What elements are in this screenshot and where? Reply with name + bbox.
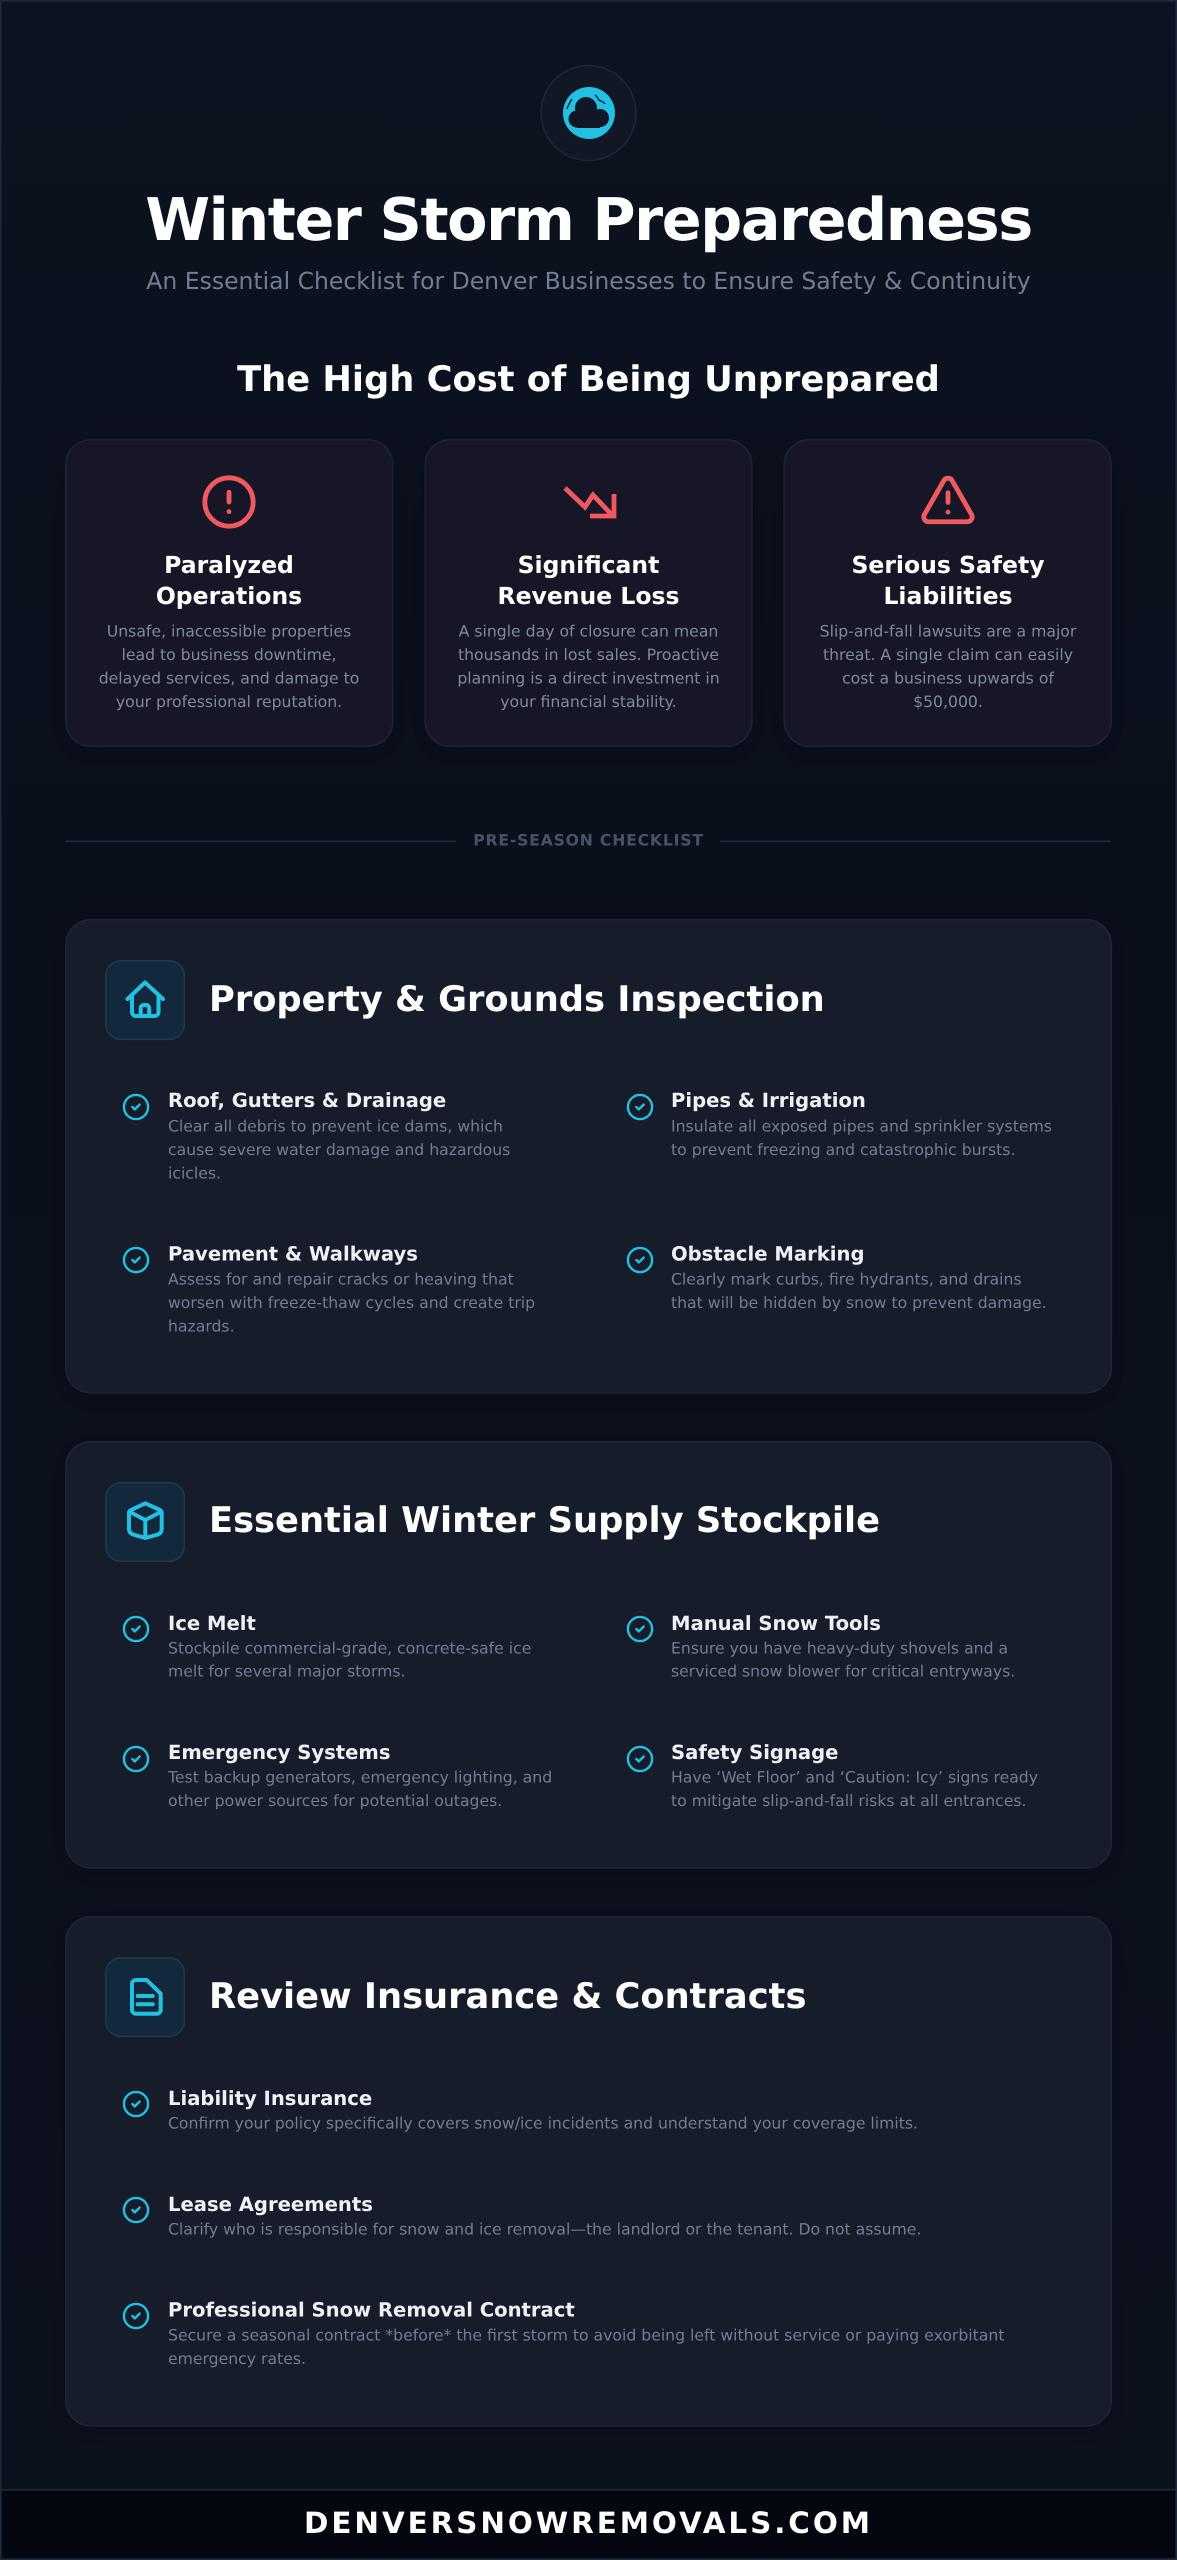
- heading: Revenue Loss: [498, 582, 679, 610]
- item: pavement: [124, 1243, 535, 1336]
- item: snow removal contract: [124, 2299, 1004, 2368]
- heading: Property & Grounds Inspection: [209, 979, 825, 1020]
- item: signage: Have ‘Wet Floor’ and ‘Caution: Icy’ signs ready: [671, 1768, 1038, 1787]
- panel: property and grounds: [66, 920, 1111, 1393]
- heading: Significant: [518, 551, 659, 579]
- item: snow removal contract: Secure a seasonal contract *before* the first storm to avoid being left without service or paying exorbitant: [168, 2326, 1004, 2345]
- description: delayed services, and damage to: [99, 669, 359, 688]
- description: your financial stability.: [500, 692, 677, 711]
- description: planning is a direct investment in: [457, 669, 720, 688]
- item: pavement: Pavement & Walkways: [168, 1243, 418, 1266]
- item: ice melt: Ice Melt: [168, 1612, 256, 1635]
- item: snow tools: [628, 1612, 1015, 1681]
- footer: [0, 2489, 1177, 2560]
- item: pavement: Assess for and repair cracks or heaving that: [168, 1270, 514, 1289]
- header icon: cloud badge: [541, 66, 636, 160]
- item: signage: [628, 1741, 1038, 1810]
- heading: Paralyzed: [164, 551, 294, 579]
- item: signage: to mitigate slip-and-fall risks at all entrances.: [671, 1791, 1027, 1810]
- heading: Serious Safety: [851, 551, 1045, 579]
- heading: high cost: The High Cost of Being Unprepared: [237, 359, 940, 400]
- item: ice melt: [124, 1612, 531, 1681]
- icon: box: [106, 1483, 184, 1561]
- item: snow tools: Manual Snow Tools: [671, 1612, 881, 1635]
- item: obstacle: that will be hidden by snow to prevent damage.: [671, 1293, 1047, 1312]
- panel: revenue loss: [425, 440, 752, 746]
- panel: safety liabilities: [784, 440, 1111, 746]
- description: $50,000.: [913, 692, 983, 711]
- item: emergency systems: [124, 1741, 552, 1810]
- item: ice melt: melt for several major storms.: [168, 1662, 406, 1681]
- item: pipes: to prevent freezing and catastrophic bursts.: [671, 1140, 1015, 1159]
- icon: warning triangle: [921, 476, 975, 524]
- item: emergency systems: Test backup generators, emergency lighting, and: [167, 1768, 552, 1787]
- panel: insurance and contracts: [66, 1917, 1111, 2426]
- item: pavement: worsen with freeze-thaw cycles and create trip: [168, 1293, 535, 1312]
- description: your professional reputation.: [116, 692, 342, 711]
- item: roof: [124, 1089, 510, 1183]
- description: cost a business upwards of: [842, 669, 1054, 688]
- item: pipes: Pipes & Irrigation: [671, 1089, 866, 1112]
- item: snow tools: Ensure you have heavy-duty shovels and a: [671, 1638, 1008, 1657]
- item: roof: cause severe water damage and hazardous: [168, 1140, 510, 1159]
- description: lead to business downtime,: [122, 645, 336, 664]
- icon: trending down: [565, 488, 614, 516]
- panel: paralyzed operations: [66, 440, 393, 746]
- item: lease: Lease Agreements: [168, 2193, 373, 2216]
- title: Winter Storm Preparedness: [145, 185, 1032, 254]
- item: obstacle: Clearly mark curbs, fire hydrants, and drains: [671, 1270, 1022, 1289]
- item: snow tools: serviced snow blower for critical entryways.: [671, 1662, 1015, 1681]
- item: ice melt: Stockpile commercial-grade, concrete-safe ice: [168, 1638, 531, 1657]
- item: liability: [124, 2087, 918, 2132]
- item: snow removal contract: Professional Snow Removal Contract: [168, 2299, 575, 2322]
- item: liability: Confirm your policy specifically covers snow/ice incidents and understand your coverage limits.: [168, 2114, 918, 2132]
- item: emergency systems: Emergency Systems: [168, 1741, 391, 1764]
- item: pipes: [628, 1089, 1052, 1159]
- divider label: PRE-SEASON CHECKLIST: [473, 830, 704, 850]
- item: liability: Liability Insurance: [168, 2087, 372, 2110]
- icon: document: [106, 1958, 184, 2036]
- panel: winter supply: [66, 1442, 1111, 1868]
- heading: Liabilities: [883, 582, 1013, 610]
- heading: Essential Winter Supply Stockpile: [209, 1500, 880, 1541]
- item: obstacle: Obstacle Marking: [671, 1243, 864, 1266]
- description: threat. A single claim can easily: [823, 645, 1073, 664]
- description: thousands in lost sales. Proactive: [458, 645, 719, 664]
- item: signage: Safety Signage: [671, 1741, 838, 1764]
- item: roof: Clear all debris to prevent ice dams, which: [168, 1117, 503, 1136]
- footer: DENVERSNOWREMOVALS.COM: [304, 2506, 873, 2540]
- item: lease: Clarify who is responsible for snow and ice removal—the landlord or the tenant. Do not assume.: [168, 2220, 921, 2239]
- item: roof: icicles.: [168, 1164, 221, 1183]
- item: roof: Roof, Gutters & Drainage: [168, 1089, 446, 1112]
- description: Slip-and-fall lawsuits are a major: [820, 622, 1077, 641]
- icon: alert circle: [202, 475, 256, 529]
- icon: house: [106, 961, 184, 1039]
- item: lease: [124, 2193, 921, 2239]
- item: pavement: hazards.: [168, 1317, 235, 1336]
- heading: Review Insurance & Contracts: [209, 1976, 806, 2017]
- item: obstacle: [628, 1243, 1047, 1312]
- heading: Operations: [156, 582, 302, 610]
- item: emergency systems: other power sources for potential outages.: [168, 1791, 502, 1810]
- subtitle: An Essential Checklist for Denver Businesses to Ensure Safety & Continuity: [146, 267, 1031, 295]
- item: pipes: Insulate all exposed pipes and sprinkler systems: [671, 1117, 1052, 1136]
- description: A single day of closure can mean: [459, 622, 718, 641]
- description: Unsafe, inaccessible properties: [107, 622, 351, 641]
- item: snow removal contract: emergency rates.: [168, 2349, 306, 2368]
